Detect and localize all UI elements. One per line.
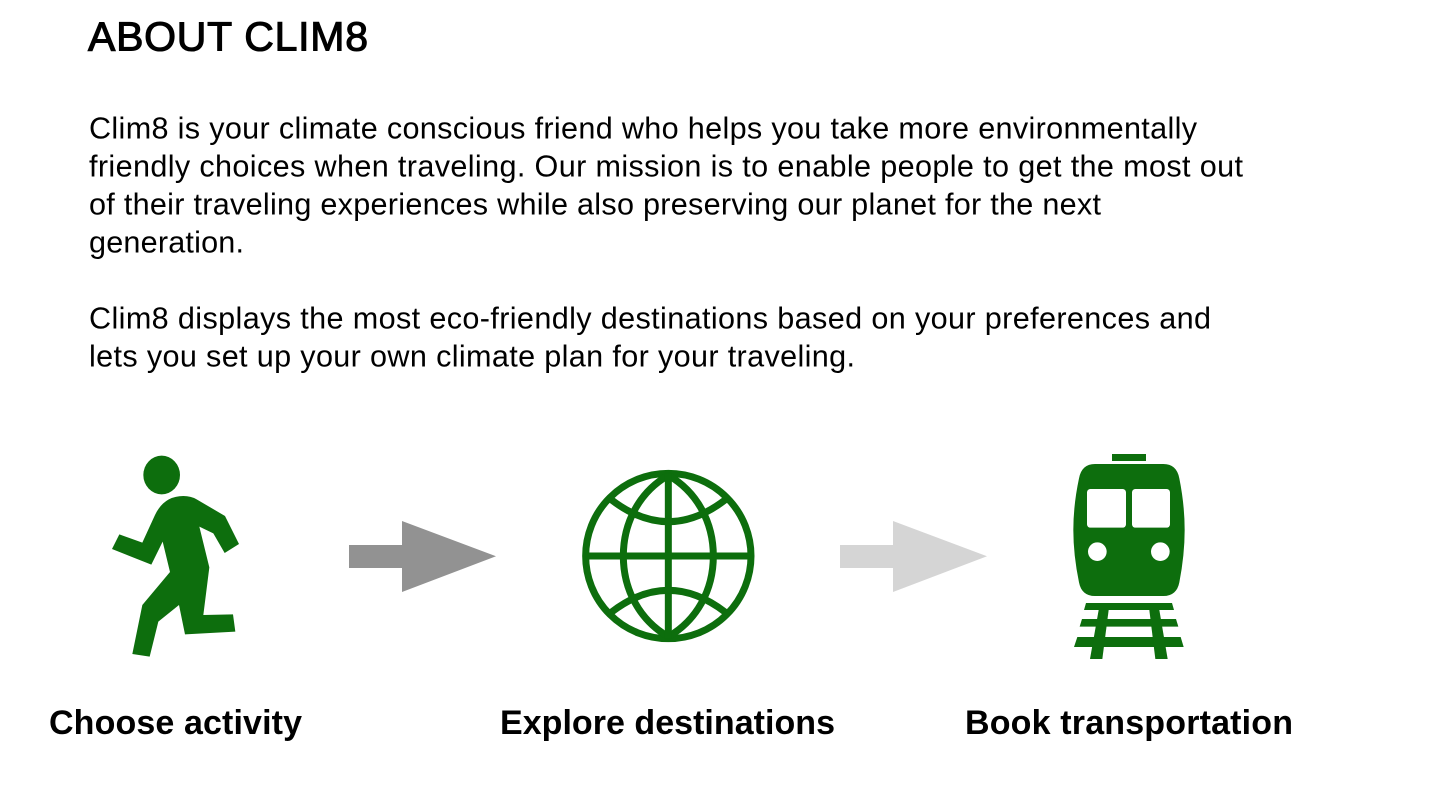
text block: product description paragraph: lets you set up your own climate plan for your traveling. [89, 339, 855, 373]
text block: mission paragraph: Clim8 is your climate conscious friend who helps you take more environmentally [89, 111, 1198, 145]
icon: train on tracks [1073, 454, 1185, 659]
text block: mission paragraph: generation. [89, 225, 244, 259]
label: choose activity: Choose activity [49, 704, 302, 742]
text block: product description paragraph: Clim8 displays the most eco-friendly destinations based on your preferences and [89, 301, 1211, 335]
label: book transportation: Book transportation [965, 704, 1293, 742]
label: explore destinations: Explore destinations [500, 704, 835, 742]
arrow: first step, dark grey [349, 521, 496, 592]
title: ABOUT CLIM8 [88, 14, 368, 60]
text block: mission paragraph: of their traveling experiences while also preserving our planet for the next [89, 187, 1102, 221]
icon: running person [112, 456, 239, 657]
arrow: second step, light grey [840, 521, 987, 592]
icon: globe [586, 473, 751, 639]
text block: mission paragraph [89, 111, 1244, 259]
text block: mission paragraph: friendly choices when traveling. Our mission is to enable people to get the most out [89, 149, 1244, 183]
text block: product description paragraph [89, 301, 1211, 373]
